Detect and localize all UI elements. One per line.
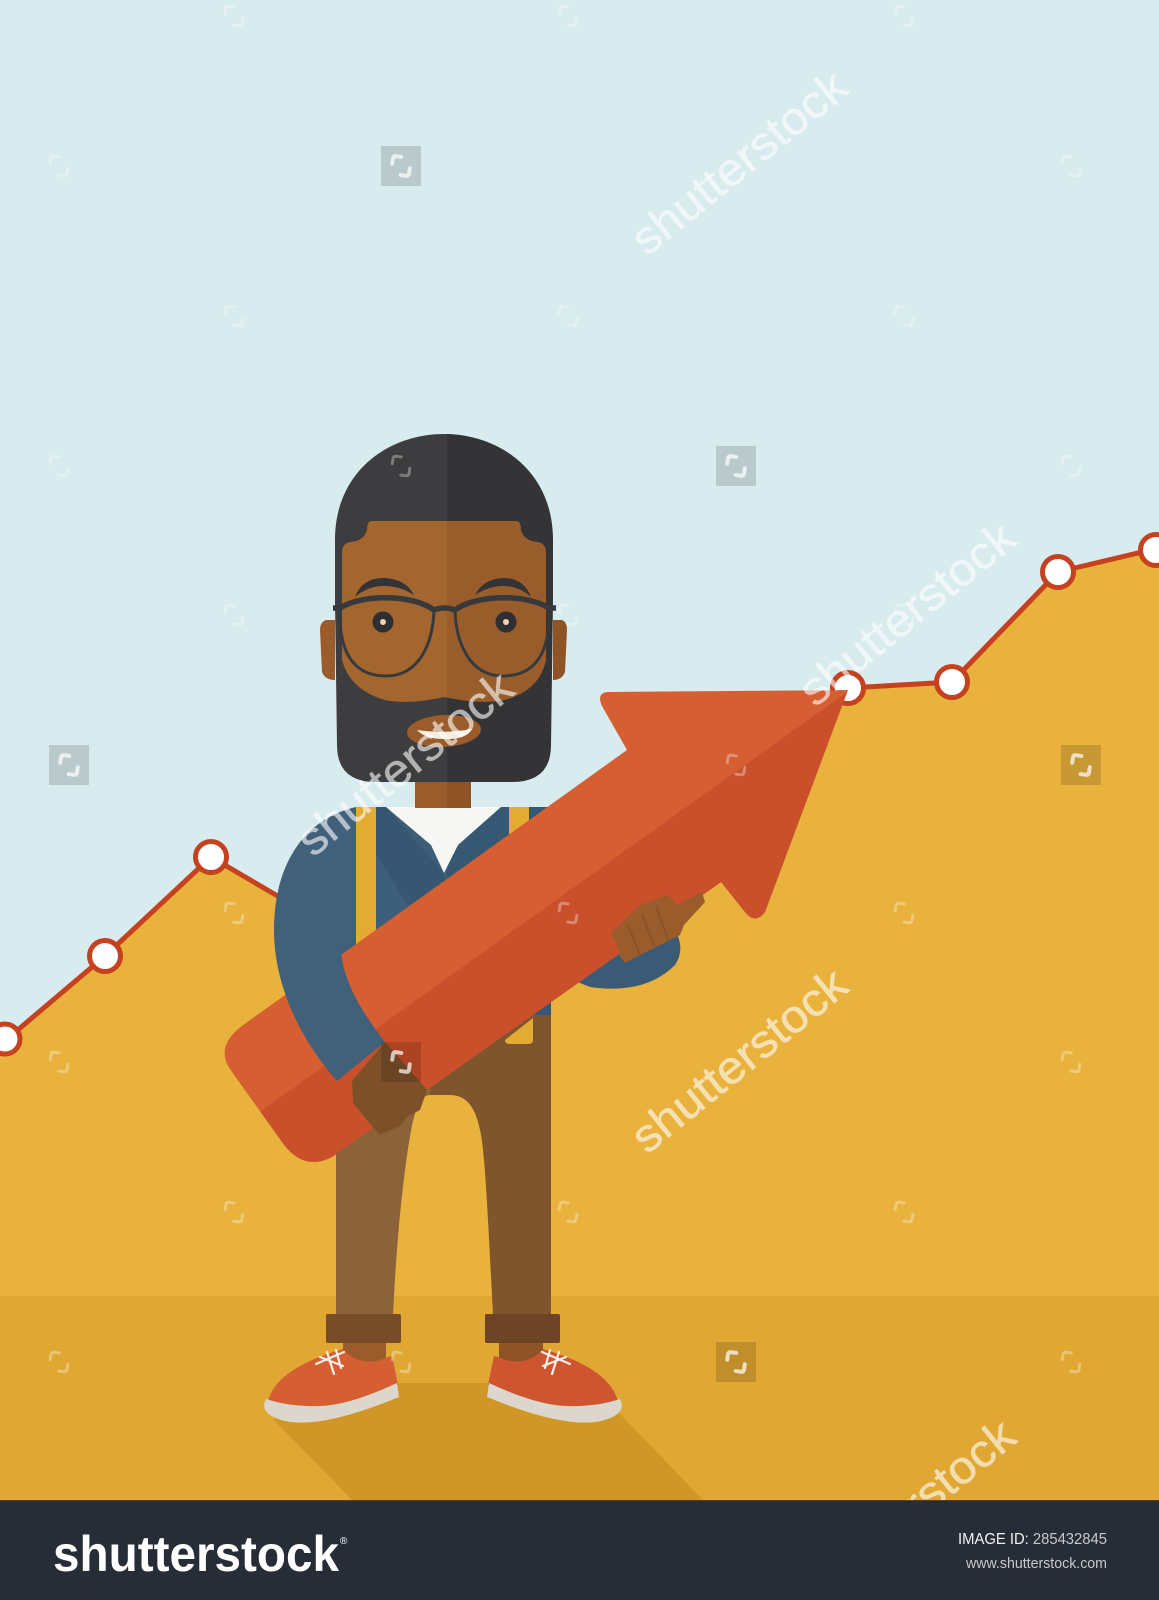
chart area [0,550,1159,1500]
watermark square badges [49,146,1101,1382]
suspenders [356,807,529,947]
left shoe [264,1343,399,1423]
watermark small brackets [49,6,1081,1372]
watermark wordmarks: shutterstock [621,59,858,265]
footer logo: shutterstock [53,1526,339,1582]
right hand [611,892,705,963]
left trouser cuff [326,1314,401,1343]
shirt collar [386,807,501,873]
footer bar [0,1500,1159,1600]
suspender tail [505,1018,533,1044]
website url: www.shutterstock.com [965,1555,1107,1572]
watermark wordmarks [287,59,1026,1600]
eyebrows [355,578,531,597]
mouth [406,713,482,749]
line chart with nodes [0,534,1159,1054]
glasses [333,598,556,676]
ears [320,620,567,680]
right shoe [487,1343,622,1423]
figure shadow [273,1383,703,1500]
watermark wordmarks: shutterstock [621,957,858,1163]
left arm sleeve [274,807,385,1081]
floor band [0,1296,1159,1500]
man figure [264,434,680,1423]
image id: IMAGE ID: 285432845 [958,1531,1107,1548]
torso vest [336,807,551,1022]
eyes [372,612,516,632]
registered mark: ® [340,1536,348,1547]
watermark wordmarks: shutterstock [789,510,1026,716]
right sleeve [560,895,680,989]
face [342,521,546,702]
right trouser cuff [485,1314,560,1343]
watermark wordmarks: shutterstock [287,660,524,866]
head hair and beard [335,434,553,782]
pants [336,1015,551,1314]
big growth arrow [225,690,860,1200]
neck [415,775,471,808]
left hand [352,1042,427,1135]
